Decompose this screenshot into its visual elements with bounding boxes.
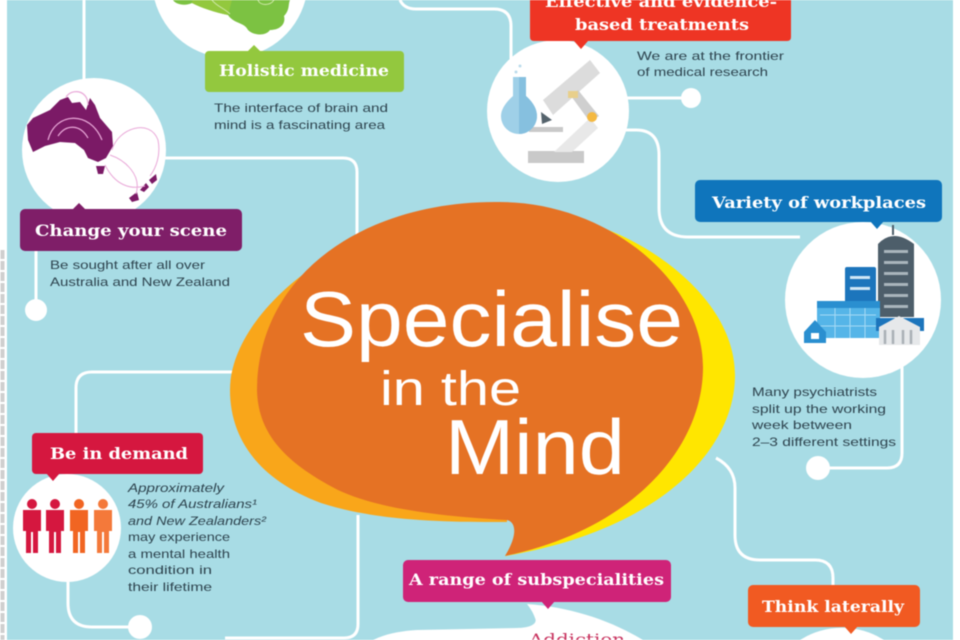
text: be in demand description: 45% of Australians¹ — [128, 497, 257, 511]
label: think laterally: Think laterally — [762, 597, 905, 616]
text: be in demand description: may experience — [128, 530, 230, 544]
text: change your scene description — [50, 258, 230, 289]
label: a range of subspecialities — [403, 560, 671, 609]
title text: Specialise — [300, 275, 683, 363]
bubble: orange body — [257, 202, 703, 556]
label: holistic medicine — [205, 45, 404, 92]
icon: people circle — [13, 474, 121, 582]
title speech bubble — [230, 202, 735, 556]
node dot — [128, 615, 152, 639]
text: effective description: of medical research — [637, 65, 768, 79]
text: effective description: We are at the frontier — [637, 49, 784, 63]
label: holistic medicine: Holistic medicine — [219, 61, 389, 80]
text: be in demand description: their lifetime — [128, 580, 212, 594]
label: variety of workplaces: Variety of workplaces — [711, 193, 926, 212]
title text: in the — [380, 363, 521, 416]
text: holistic description: mind is a fascinating area — [214, 118, 385, 132]
title text — [300, 275, 683, 491]
icon: Australia map circle — [22, 78, 166, 222]
label: change your scene — [20, 203, 242, 251]
label: be in demand: Be in demand — [50, 444, 188, 463]
text: be in demand description: and New Zealanders² — [128, 514, 267, 528]
panel: think laterally — [748, 585, 920, 640]
icon: buildings circle — [785, 222, 941, 378]
person 2 — [46, 499, 64, 553]
label: be in demand — [32, 433, 203, 481]
text: be in demand description: a mental health — [128, 547, 230, 561]
panel: be in demand — [13, 433, 267, 639]
text: variety description — [751, 385, 896, 449]
text: variety description: split up the working — [752, 402, 886, 416]
panel: variety of workplaces — [695, 180, 942, 480]
white cloud shape — [373, 604, 643, 640]
node dot — [25, 299, 47, 321]
text: holistic description — [214, 101, 388, 132]
panel: a range of subspecialities — [373, 560, 671, 640]
text: change your scene description: Australia and New Zealand — [50, 275, 230, 289]
text: effective description — [637, 49, 784, 79]
icon: brain circle — [155, 0, 305, 58]
icon: microscope and flask — [487, 40, 629, 182]
label: effective and evidence-based treatments — [530, 0, 791, 49]
text: variety description: 2–3 different settings — [752, 435, 896, 449]
text: variety description: Many psychiatrists — [752, 385, 877, 399]
label: a range of subspecialities: A range of subspecialities — [408, 570, 664, 589]
title text: Mind — [445, 403, 625, 491]
bubble: yellow shadow — [505, 222, 735, 556]
text: holistic description: The interface of brain and — [214, 101, 388, 115]
label: think laterally — [748, 585, 920, 634]
node dot — [681, 88, 701, 108]
text: be in demand description: condition in — [128, 563, 212, 577]
icon circle — [800, 628, 884, 640]
bubble: amber shadow — [230, 260, 507, 522]
node dot — [806, 456, 830, 480]
label: change your scene: Change your scene — [35, 221, 227, 240]
text: be in demand description — [127, 481, 267, 594]
panel: holistic medicine — [155, 0, 404, 132]
person 3 — [70, 499, 88, 553]
panel: change your scene — [20, 78, 242, 321]
text: variety description: week between — [751, 418, 852, 432]
label: effective and evidence-based treatments: based treatments — [575, 15, 749, 34]
text: change your scene description: Be sought after all over — [50, 258, 205, 272]
panel: effective and evidence-based treatments — [487, 0, 791, 182]
person 4 — [94, 499, 112, 553]
text: be in demand description: Approximately — [127, 481, 225, 495]
person 1 — [23, 499, 41, 553]
label: variety of workplaces — [695, 180, 942, 229]
